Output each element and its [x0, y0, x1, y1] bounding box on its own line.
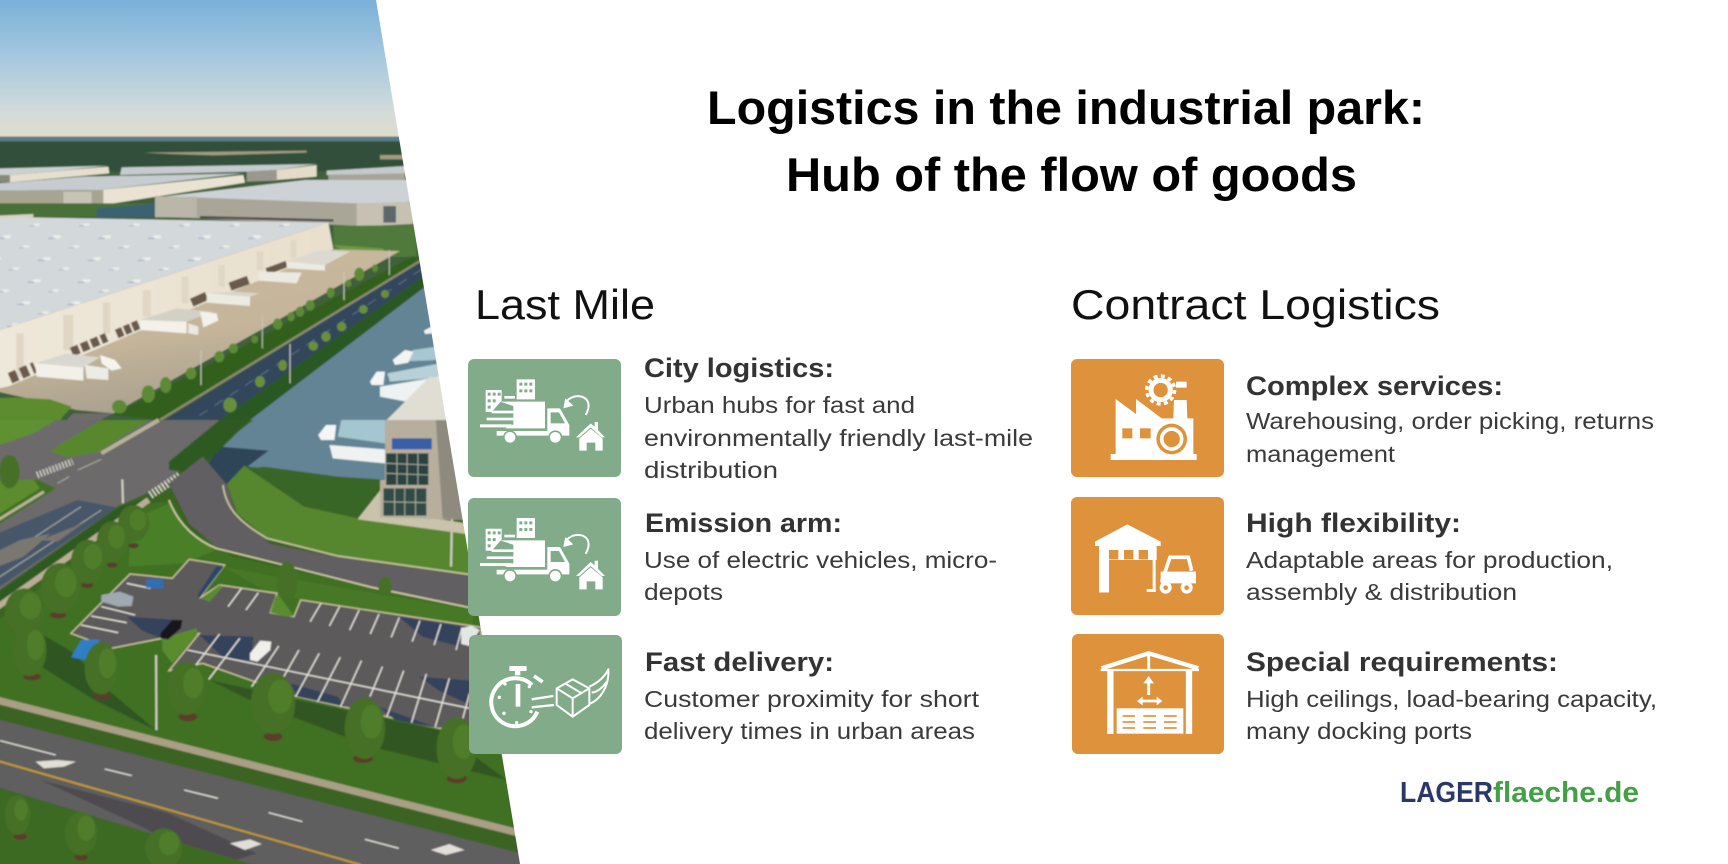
title: Hub of the flow of goods [786, 148, 1357, 201]
text: special requirements: many docking ports [1246, 718, 1472, 744]
text: high flexibility [1246, 508, 1613, 605]
text: city logistics: environmentally friendly last-mile [644, 425, 1033, 451]
bushes along verge [112, 264, 378, 413]
road-side planting strip [220, 277, 426, 420]
lawn by parking [0, 502, 514, 827]
road junction [0, 420, 220, 597]
trucks at right yard [370, 327, 440, 403]
loading apron [0, 249, 400, 413]
text: city logistics: City logistics: [644, 353, 834, 383]
text: high flexibility: assembly & distribution [1246, 579, 1517, 605]
text: complex services: management [1246, 441, 1396, 467]
heading: Last Mile: Last Mile [475, 281, 655, 328]
main warehouse roof [0, 217, 328, 333]
text: high flexibility: Adaptable areas for production, [1246, 547, 1613, 573]
icon: delivery truck with city and home [480, 379, 605, 451]
lower road [0, 717, 524, 864]
text: emission arm: Use of electric vehicles, micro- [644, 547, 997, 573]
card: fast delivery icon [469, 635, 622, 754]
card: complex services icon [1071, 359, 1224, 477]
text: city logistics [644, 353, 1033, 483]
text: complex services: Complex services: [1246, 371, 1503, 401]
ground grass [0, 420, 534, 864]
main road [165, 261, 423, 420]
text: high flexibility: High flexibility: [1246, 508, 1461, 538]
text: fast delivery: Fast delivery: [645, 647, 834, 677]
text: special requirements: High ceilings, load-bearing capacity, [1246, 686, 1657, 712]
bottom verge [182, 844, 236, 864]
card: city logistics icon [468, 359, 621, 477]
main warehouse wall [0, 223, 333, 390]
sidewalk by main road [0, 501, 140, 600]
icon: warehouse with forklift [1095, 524, 1196, 594]
curved access road [169, 457, 473, 607]
left island lawn [0, 479, 56, 524]
text: emission arm: Emission arm: [645, 508, 842, 538]
parked trucks at docks [35, 250, 350, 381]
distribution building roof [387, 377, 448, 420]
icon: factory with gears [1111, 376, 1197, 460]
logo: LAGERflaeche.de: flaeche.de [1493, 777, 1639, 809]
parked cars [101, 592, 480, 662]
parking bay lines [81, 583, 470, 727]
card: high flexibility icon [1071, 497, 1224, 615]
photo: aerial view of industrial park [0, 0, 540, 864]
text: fast delivery: Customer proximity for short [644, 686, 980, 712]
parking lot [71, 559, 481, 728]
shadowed road stripes [0, 500, 117, 593]
truck yard continued [216, 420, 389, 480]
green verge [113, 256, 421, 420]
distribution building [358, 420, 468, 534]
text: emission arm: depots [644, 579, 723, 605]
text: emission arm [644, 508, 997, 605]
title: Logistics in the industrial park: [707, 81, 1425, 134]
icon: high-ceiling hall with arrows [1101, 653, 1199, 734]
text: fast delivery: delivery times in urban areas [644, 718, 975, 744]
lower sidewalk [0, 698, 520, 833]
heading: Contract Logistics: Contract Logistics [1071, 281, 1440, 328]
logo: LAGERflaeche.de: LAGER [1400, 777, 1493, 809]
crosswalks [37, 462, 73, 475]
text: complex services: Warehousing, order picking, returns [1246, 408, 1654, 434]
title [707, 81, 1425, 201]
trees [0, 455, 477, 864]
text: city logistics: Urban hubs for fast and [644, 392, 915, 418]
text: fast delivery [644, 647, 980, 744]
right yard truck [318, 420, 385, 463]
icon: delivery truck with city and home [480, 518, 605, 589]
text: special requirements: Special requirements: [1246, 647, 1558, 677]
icon: stopwatch and winged parcel [491, 666, 608, 726]
card: emission arm icon [468, 498, 621, 616]
text: city logistics: distribution [644, 457, 778, 483]
card: special requirements icon [1072, 634, 1224, 754]
text: special requirements [1246, 647, 1657, 744]
text: complex services [1246, 371, 1654, 467]
light poles [122, 479, 452, 730]
truck yard [250, 286, 450, 420]
logo: LAGERflaeche.de [1400, 777, 1639, 809]
parking shadows [127, 617, 470, 728]
